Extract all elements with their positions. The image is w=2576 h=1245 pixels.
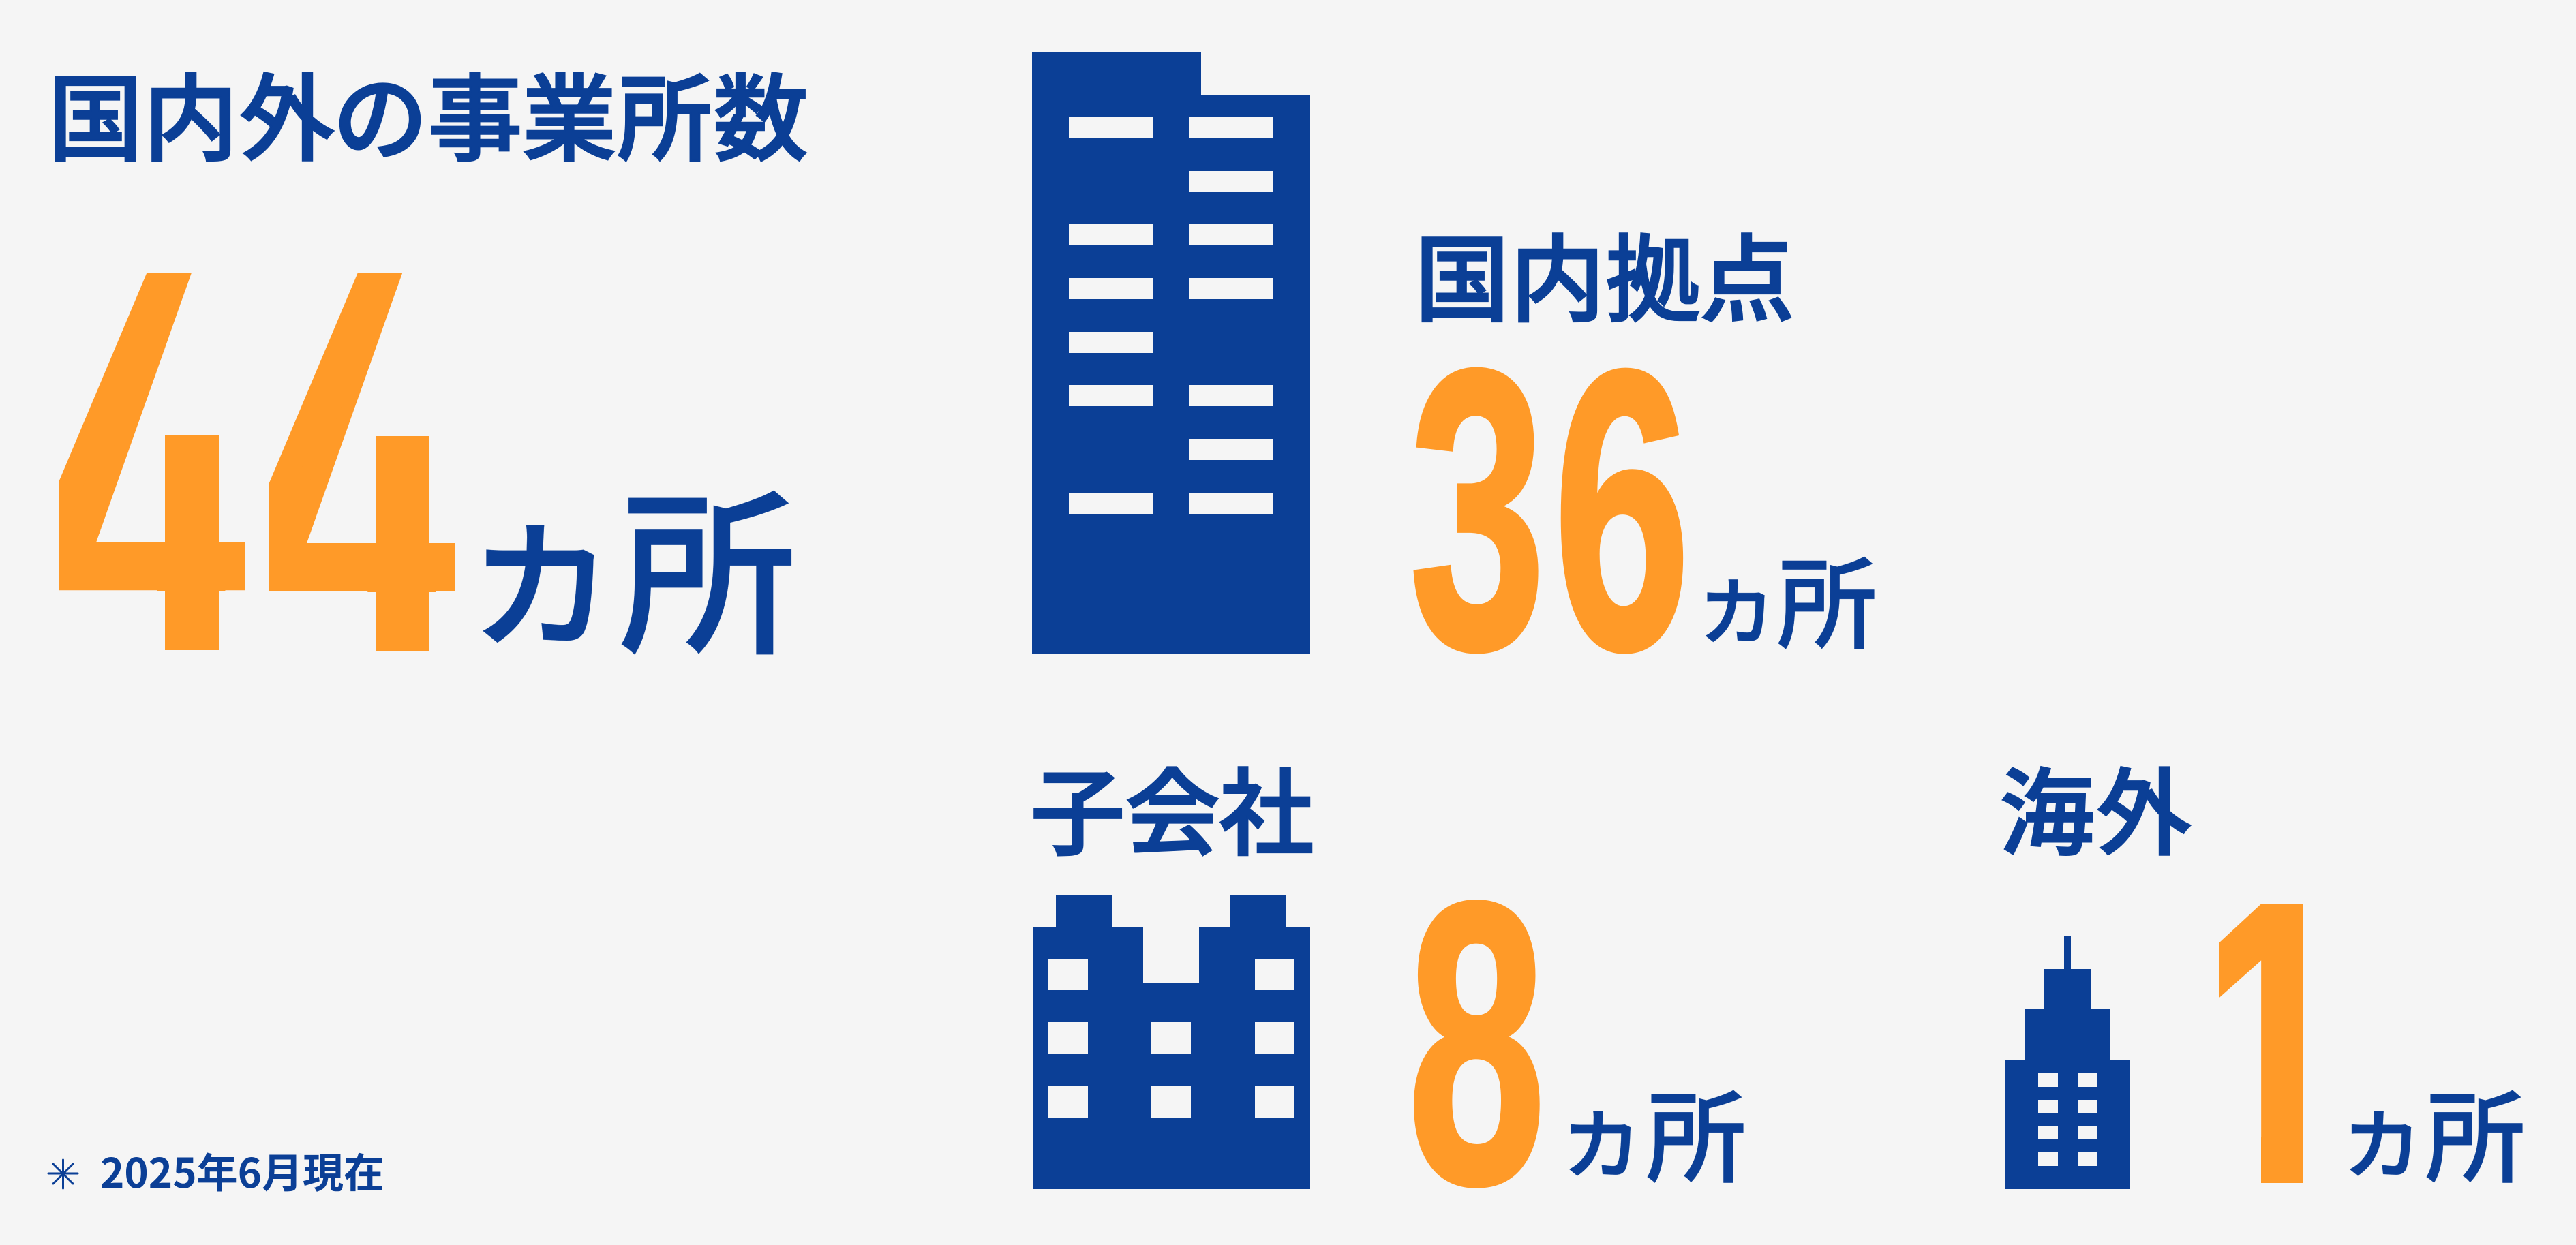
total count: 44: 4 — [262, 154, 461, 767]
title: 国内外の事業所数 — [48, 44, 808, 181]
total count: 44 — [59, 273, 455, 651]
unit: domestic: ヵ — [1692, 532, 1782, 662]
icon: asterisk note mark — [48, 1160, 78, 1188]
footnote: as of June 2025: 2025年6月現在 — [100, 1141, 384, 1200]
unit: overseas: 所 — [2425, 1057, 2526, 1203]
icon: subsidiary building — [1033, 895, 1310, 1189]
unit: subsidiaries: ヵ — [1555, 1060, 1649, 1197]
domestic count: 36 — [1410, 289, 1691, 732]
icon: overseas skyscraper — [2005, 936, 2130, 1189]
unit: total: 所 — [618, 433, 797, 691]
unit: subsidiaries: 所 — [1646, 1057, 1746, 1203]
heading: domestic bases: 国内拠点 — [1415, 204, 1794, 341]
domestic count: 36: 3 — [1410, 289, 1545, 731]
unit: total: ヵ — [457, 433, 627, 680]
icon: domestic office building — [1032, 52, 1310, 654]
heading: overseas: 海外 — [2000, 738, 2191, 875]
domestic count: 36: 6 — [1554, 289, 1691, 732]
unit: domestic: 所 — [1776, 523, 1877, 670]
heading: subsidiaries: 子会社 — [1031, 738, 1314, 875]
unit: overseas: ヵ — [2335, 1060, 2429, 1197]
total count: 44: 4 — [52, 153, 251, 767]
